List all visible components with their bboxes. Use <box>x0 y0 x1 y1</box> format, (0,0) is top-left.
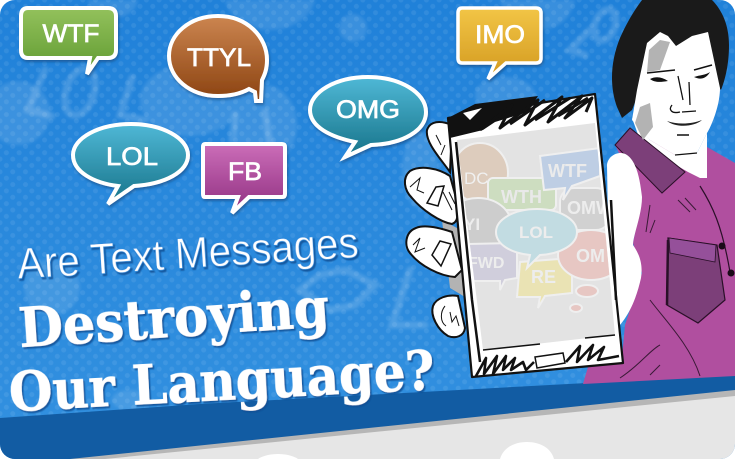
screen bubble: LOL: LOL <box>519 223 553 242</box>
person: hair <box>612 0 729 118</box>
phone: screen edge <box>456 142 616 362</box>
phone: screen bubbles <box>458 142 610 313</box>
phone: top scribble <box>448 96 592 138</box>
ghost background bubbles <box>0 0 575 410</box>
screen bubble: FWD: FWD <box>468 255 504 272</box>
screen bubble: DC: DC <box>464 169 489 188</box>
screen bubble: OMW: OMW <box>567 198 613 218</box>
person: shirt pocket <box>667 238 725 323</box>
screen bubble: WTF <box>540 148 600 200</box>
screen bubble: LOL <box>496 209 577 268</box>
screen bubble: OMW <box>559 187 605 230</box>
screen bubble: RE <box>517 258 572 308</box>
speech bubble: FB: FB <box>228 158 262 186</box>
speech bubble: WTF: WTF <box>42 20 100 48</box>
speech bubble: IMO: IMO <box>475 21 525 49</box>
speech bubble: TTYL: TTYL <box>187 44 251 72</box>
speech bubble: IMO <box>458 8 541 79</box>
speech bubble: OMG: OMG <box>336 96 400 124</box>
phone <box>445 94 624 377</box>
screen bubble: OM: OM <box>576 246 605 266</box>
screen bubble: YI <box>445 198 511 250</box>
speech bubble: WTF <box>21 8 116 74</box>
band: dark blue ribbon <box>0 375 735 459</box>
speech bubble: TTYL <box>169 16 267 101</box>
person: face <box>632 32 720 155</box>
screen bubble: FWD <box>468 243 517 290</box>
screen bubble: WTH <box>488 178 556 210</box>
phone: body <box>448 94 623 377</box>
title line 3: Our Language? <box>7 338 436 424</box>
hand: finger 1 <box>427 122 452 172</box>
title line 1: Are Text Messages <box>15 218 360 289</box>
screen bubble: RE: RE <box>531 267 556 287</box>
screen bubble: small pink <box>576 285 598 297</box>
screen bubble: DC <box>458 142 509 199</box>
screen bubble: tiny pink <box>570 304 582 312</box>
screen bubble: WTF: WTF <box>548 161 587 181</box>
phone: bottom scribble <box>476 345 619 376</box>
phone: screen bottom edge <box>483 335 615 350</box>
screen bubble: YI: YI <box>464 215 480 234</box>
person: collar <box>615 128 685 193</box>
screen bubble: WTH: WTH <box>501 187 542 207</box>
title line 2: Destroying <box>17 275 331 360</box>
ghost background letters <box>28 7 620 325</box>
hand: finger 2 <box>405 168 458 224</box>
speech bubble: OMG <box>310 77 426 157</box>
hand: finger 3 <box>406 226 462 277</box>
speech bubble: LOL: LOL <box>106 143 158 171</box>
speech bubble: FB <box>203 144 285 213</box>
phone: screen <box>457 123 615 350</box>
person: neck <box>632 118 707 178</box>
hand: finger 4 <box>432 295 465 337</box>
speech bubble: LOL <box>73 124 188 204</box>
person: shirt <box>583 130 735 384</box>
hand: palm <box>607 153 642 335</box>
footer: light grey panel <box>70 390 735 459</box>
phone: home button <box>535 353 565 368</box>
hand: palm shadow <box>442 222 464 296</box>
screen bubble: OM <box>558 230 624 280</box>
